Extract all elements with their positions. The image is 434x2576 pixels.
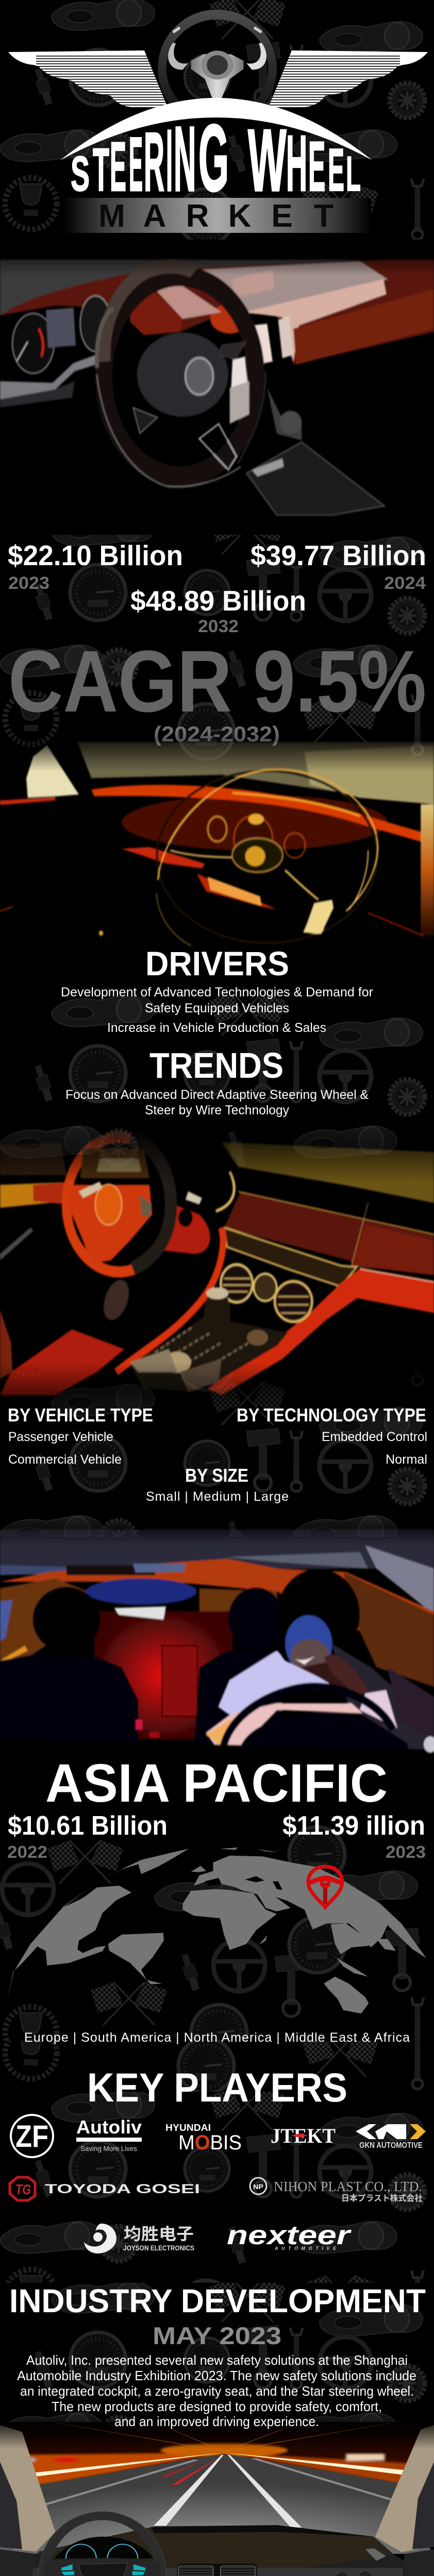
text: industry development description: [17, 2352, 416, 2429]
text: vehicle type items: [8, 1430, 122, 1467]
logo: Nihon Plast: NIHON PLAST CO., LTD.: [274, 2179, 422, 2194]
heading: drivers: DRIVERS: [145, 944, 289, 982]
stat: CAGR: (2024-2032): [154, 722, 280, 746]
text: trend description: [65, 1088, 369, 1117]
text: driver two: Increase in Vehicle Production & Sales: [107, 1021, 326, 1035]
subtitle band: MARKET: T: [314, 198, 333, 234]
heading: trends: TRENDS: [149, 1045, 283, 1086]
stat: Asia Pacific 2023: $11.39 illion: [282, 1811, 425, 1841]
heading: by vehicle type: BY VEHICLE TYPE: [8, 1404, 153, 1426]
stat: 2032 market value: $48.89 Billion: [130, 585, 306, 617]
logo: Toyoda Gosei: [10, 2177, 200, 2200]
photo: woman in car at night: [0, 1524, 434, 1754]
segment: by size: [146, 1465, 289, 1504]
text: technology type items: [322, 1430, 427, 1467]
title: STEERING WHEEL: L: [346, 146, 361, 202]
text: technology type items: Normal: [386, 1452, 427, 1467]
stat: Asia Pacific 2022: 2022: [7, 1842, 47, 1861]
logo: Hyundai Mobis: HYUNDAI: [165, 2123, 211, 2133]
logo: Nexteer Automotive: AUTOMOTIVE: [274, 2246, 337, 2251]
stat: Asia Pacific 2023: 2023: [386, 1842, 426, 1861]
segment: by vehicle type: [8, 1404, 153, 1467]
logo: Hyundai Mobis: [165, 2123, 242, 2154]
text: size items: Small | Medium | Large: [146, 1489, 289, 1504]
subtitle band: MARKET: K: [228, 198, 252, 234]
subtitle band: MARKET: [63, 198, 371, 234]
text: industry development description: an integrated cockpit, a zero-gravity seat, and the Star steering wheel.: [20, 2383, 414, 2399]
title logo: winged steering wheel: [8, 9, 428, 234]
logo: Nihon Plast: 日本プラスト株式会社: [341, 2194, 423, 2203]
text: vehicle type items: Passenger Vehicle: [8, 1430, 113, 1444]
subtitle band: MARKET: M: [98, 198, 125, 234]
logo: Autoliv: Saving More Lives: [80, 2144, 137, 2153]
subtitle band: MARKET: A: [143, 198, 166, 234]
title: STEERING WHEEL: E: [308, 127, 325, 206]
stat: 2032 market value: [130, 585, 306, 636]
logo: Hyundai Mobis: MOBIS: [178, 2131, 242, 2154]
title: STEERING WHEEL: I: [166, 112, 173, 210]
stat: Asia Pacific 2023: [282, 1811, 426, 1861]
photo: vintage car steering wheel in red and gold light: [0, 735, 434, 947]
photo: modern car dashboard with steering wheel: [0, 259, 434, 517]
logos: key players: [10, 2115, 426, 2253]
logo: Joyson Electronics: 均胜电子: [124, 2225, 194, 2243]
title: STEERING WHEEL: E: [328, 136, 344, 204]
logo: Toyoda Gosei: TOYODA GOSEI: [45, 2182, 200, 2196]
section: drivers: [61, 944, 373, 1035]
stat: Asia Pacific 2022: $10.61 Billion: [8, 1811, 168, 1841]
stat: 2023 market value: $22.10 Billion: [8, 539, 183, 571]
title: STEERING WHEEL: R: [144, 115, 164, 209]
title: STEERING WHEEL: G: [198, 105, 229, 211]
title: STEERING WHEEL: [71, 105, 361, 211]
logo: Autoliv: [76, 2116, 142, 2153]
stat: Asia Pacific 2022: [7, 1811, 168, 1861]
title: STEERING WHEEL: E: [110, 127, 126, 206]
title: STEERING WHEEL: S: [71, 146, 90, 201]
icon: red steering wheel map pin: [308, 1867, 342, 1907]
title: STEERING WHEEL: E: [129, 122, 143, 208]
stat: 2032 market value: 2032: [198, 617, 239, 636]
text: industry development description: The new products are designed to provide safety, comfort,: [52, 2399, 382, 2414]
logo: Autoliv: Autoliv: [76, 2116, 142, 2138]
icon: left wing: [8, 50, 170, 108]
heading: industry development: INDUSTRY DEVELOPMENT: [9, 2282, 426, 2319]
photo: luxury red leather interior: [0, 1123, 434, 1422]
logo: ZF: ZF: [15, 2119, 48, 2154]
text: driver one: [61, 985, 373, 1015]
subtitle band: MARKET: E: [271, 198, 293, 234]
text: driver one: Safety Equipped Vehicles: [145, 1001, 289, 1015]
world map globe: [8, 1848, 426, 2013]
logo: Joyson Electronics: JOYSON ELECTRONICS: [123, 2244, 194, 2252]
text: other regions: Europe | South America | North America | Middle East & Africa: [24, 2030, 410, 2045]
title: STEERING WHEEL: W: [248, 111, 287, 210]
logo: GKN Automotive: GKN AUTOMOTIVE: [359, 2141, 423, 2150]
icon: steering wheel: [158, 9, 277, 104]
stat: 2023 market value: [8, 539, 183, 593]
text: industry development description: Autoliv, Inc. presented several new safety solutions at the Shanghai: [26, 2352, 408, 2368]
text: technology type items: Embedded Control: [322, 1430, 427, 1444]
heading: May 2023: MAY 2023: [153, 2322, 281, 2349]
photo: illustrated car cockpit on night highway: [0, 2416, 434, 2576]
heading: key players: KEY PLAYERS: [87, 2064, 347, 2110]
section: trends: [65, 1045, 369, 1117]
text: industry development description: and an improved driving experience.: [114, 2414, 319, 2429]
logo: JTEKT: JTEKT: [271, 2124, 336, 2147]
icon: right wing: [266, 50, 428, 108]
logo: Toyoda Gosei: TG: [15, 2181, 31, 2197]
text: vehicle type items: Commercial Vehicle: [8, 1452, 122, 1467]
logo: Nexteer Automotive: nexteer: [227, 2221, 352, 2250]
heading: by size: BY SIZE: [185, 1465, 248, 1486]
logo: GKN Automotive: [356, 2124, 426, 2150]
text: industry development description: Automobile Industry Exhibition 2023. The new safety solutions include: [17, 2368, 416, 2383]
icon: white arch: [60, 98, 372, 160]
stat: 2024 market value: $39.77 Billion: [251, 539, 426, 571]
text: trend description: Steer by Wire Technology: [145, 1103, 289, 1117]
logo: Nihon Plast: [250, 2178, 423, 2203]
heading: Asia Pacific: ASIA PACIFIC: [45, 1753, 388, 1814]
subtitle band: MARKET: R: [186, 198, 209, 234]
stat: 2024 market value: 2024: [384, 573, 426, 593]
text: driver one: Development of Advanced Technologies & Demand for: [61, 985, 373, 999]
title: STEERING WHEEL: T: [93, 136, 109, 204]
logo: Joyson Electronics: [84, 2224, 194, 2253]
stat: 2024 market value: [251, 539, 426, 593]
logo: Nihon Plast: NP: [253, 2183, 263, 2191]
segment: by technology type: [237, 1404, 427, 1467]
title: STEERING WHEEL: N: [174, 108, 196, 211]
text: trend description: Focus on Advanced Direct Adaptive Steering Wheel &: [65, 1088, 369, 1102]
stat: 2023 market value: 2023: [8, 573, 49, 593]
title: STEERING WHEEL: H: [286, 119, 307, 208]
